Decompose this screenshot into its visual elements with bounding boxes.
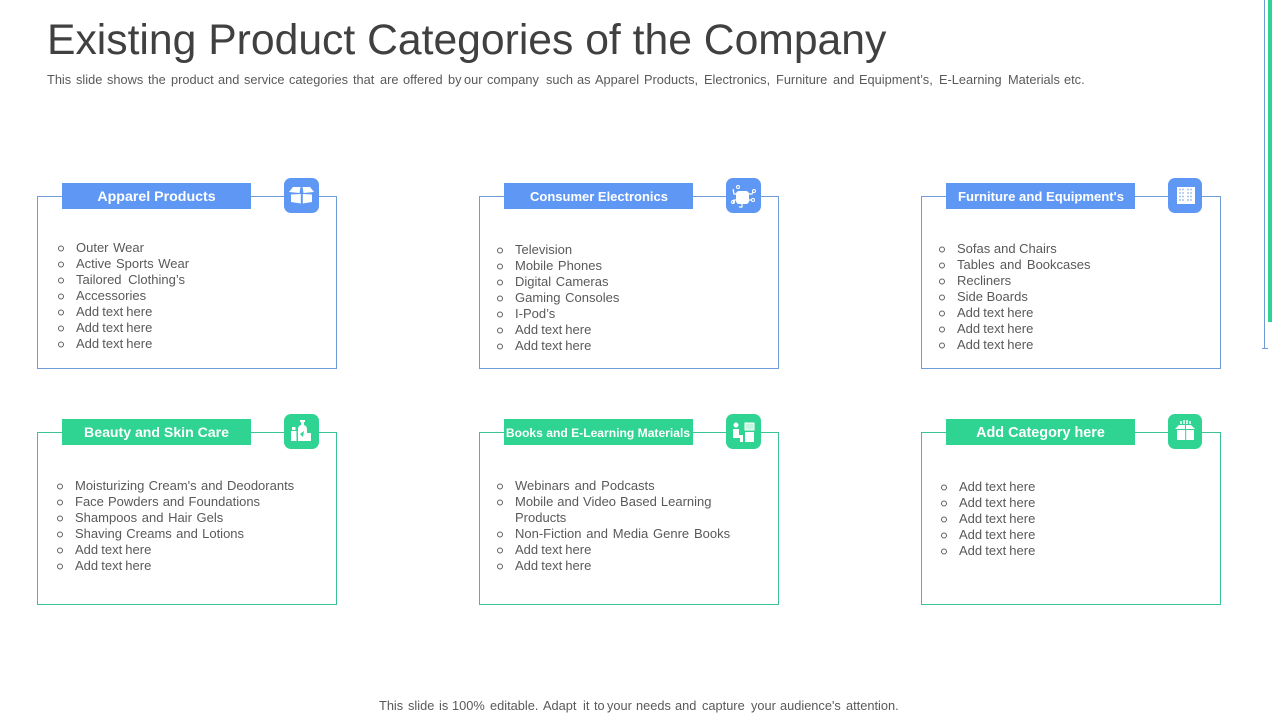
footer note: it (583, 698, 590, 713)
panel: apparel products (38, 178, 336, 368)
list: furniture items: Recliners (957, 273, 1012, 288)
list: beauty items: Add text here (75, 542, 151, 557)
subtitle: service (244, 72, 285, 87)
subtitle: such (546, 72, 573, 87)
icon: gift box (1168, 414, 1202, 449)
list: apparel items: Outer Wear (76, 240, 145, 255)
list: beauty items: Face Powders and Foundations (75, 494, 261, 509)
subtitle: slide (76, 72, 102, 87)
heading: apparel products (62, 183, 251, 209)
icon: circuit chip (726, 178, 761, 213)
subtitle: Materials (1008, 72, 1060, 87)
subtitle: Products, (644, 72, 698, 87)
list: e-learning items: Add text here (515, 542, 591, 557)
list: electronics items: Mobile Phones (515, 258, 602, 273)
panel: beauty and skin care (38, 414, 336, 604)
list: add category items: Add text here (959, 495, 1035, 510)
list: apparel items: Accessories (76, 288, 147, 303)
list: electronics items: Digital Cameras (515, 274, 609, 289)
subtitle: shows (107, 72, 143, 87)
subtitle: by (448, 72, 462, 87)
list: furniture items: Add text here (957, 337, 1033, 352)
list: add category items: Add text here (959, 527, 1035, 542)
list: furniture items (940, 241, 1091, 352)
subtitle: company (487, 72, 540, 87)
list: apparel items: Add text here (76, 304, 152, 319)
list: furniture items: Add text here (957, 321, 1033, 336)
list: beauty items: Moisturizing Cream's and Deodorants (75, 478, 295, 493)
list: electronics items: Add text here (515, 322, 591, 337)
heading: consumer electronics: Consumer Electronics (530, 189, 668, 204)
list: add category items: Add text here (959, 543, 1035, 558)
footer note: editable. (490, 698, 538, 713)
heading: beauty and skin care (62, 419, 251, 445)
footer note: audience's (780, 698, 841, 713)
icon: building grid (1168, 178, 1202, 213)
subtitle: and (218, 72, 239, 87)
list: apparel items (58, 240, 190, 351)
list: add category items (942, 479, 1035, 558)
panel: consumer electronics (480, 178, 778, 368)
heading: apparel products: Apparel Products (97, 189, 216, 205)
list: furniture items: Side Boards (957, 289, 1028, 304)
list: beauty items: Shampoos and Hair Gels (75, 510, 224, 525)
list: furniture items: Add text here (957, 305, 1033, 320)
list: beauty items: Shaving Creams and Lotions (75, 526, 245, 541)
list: furniture items: Sofas and Chairs (957, 241, 1057, 256)
heading: furniture and equipment (946, 183, 1135, 209)
subtitle: E-Learning (939, 72, 1002, 87)
subtitle: Apparel (595, 72, 639, 87)
subtitle: Equipment’s, (859, 72, 933, 87)
subtitle: are (380, 72, 398, 87)
list: e-learning items: Non-Fiction and Media Genre Books (515, 526, 731, 541)
footer note: to (594, 698, 605, 713)
panel: add category (922, 414, 1220, 604)
heading: add category: Add Category here (976, 425, 1105, 441)
footer note: your (607, 698, 633, 713)
list: apparel items: Add text here (76, 320, 152, 335)
list: electronics items: I-Pod’s (515, 306, 556, 321)
heading: books and e-learning: Books and E-Learning Materials (506, 426, 690, 440)
subtitle: the (148, 72, 166, 87)
list: add category items: Add text here (959, 479, 1035, 494)
list: e-learning items: Webinars and Podcasts (515, 478, 655, 493)
icon: person at desk (726, 414, 761, 449)
list: add category items: Add text here (959, 511, 1035, 526)
footer note: slide (408, 698, 434, 713)
subtitle: categories (289, 72, 348, 87)
footer note: This (379, 698, 403, 713)
list: e-learning items (498, 478, 731, 573)
panel: books and e-learning (480, 414, 778, 604)
title: Existing Product Categories of the Company (47, 16, 887, 64)
list: e-learning items: Add text here (515, 558, 591, 573)
list: electronics items: Television (515, 242, 572, 257)
subtitle: offered (403, 72, 443, 87)
subtitle: our (464, 72, 483, 87)
subtitle: etc. (1064, 72, 1085, 87)
footer note: attention. (846, 698, 899, 713)
heading: books and e-learning (504, 419, 693, 445)
heading: add category (946, 419, 1135, 445)
list: apparel items: Add text here (76, 336, 152, 351)
subtitle: that (353, 72, 375, 87)
list: e-learning items: Mobile and Video Based Learning (515, 494, 712, 509)
list: e-learning items: Products (515, 510, 567, 525)
list: electronics items: Add text here (515, 338, 591, 353)
footer note: your (751, 698, 777, 713)
heading: beauty and skin care: Beauty and Skin Care (84, 424, 229, 440)
icon: open box (284, 178, 319, 213)
subtitle: product (171, 72, 214, 87)
list: beauty items: Add text here (75, 558, 151, 573)
subtitle: and (833, 72, 854, 87)
list: apparel items: Active Sports Wear (76, 256, 190, 271)
subtitle: as (577, 72, 591, 87)
list: beauty items (58, 478, 295, 573)
footer note: and (675, 698, 696, 713)
list: electronics items (498, 242, 620, 353)
subtitle: This (47, 72, 71, 87)
list: electronics items: Gaming Consoles (515, 290, 620, 305)
footer note: capture (702, 698, 745, 713)
subtitle: Electronics, (704, 72, 770, 87)
heading: consumer electronics (504, 183, 693, 209)
subtitle: Furniture (776, 72, 827, 87)
footer note: needs (636, 698, 671, 713)
footer note: is (439, 698, 448, 713)
list: apparel items: Tailored Clothing’s (76, 272, 185, 287)
heading: furniture and equipment: Furniture and Equipment's (958, 189, 1124, 204)
panel: furniture and equipment (922, 178, 1220, 368)
footer note: Adapt (543, 698, 577, 713)
footer note: 100% (452, 698, 485, 713)
list: furniture items: Tables and Bookcases (957, 257, 1091, 272)
icon: cosmetics bottles (284, 414, 319, 449)
